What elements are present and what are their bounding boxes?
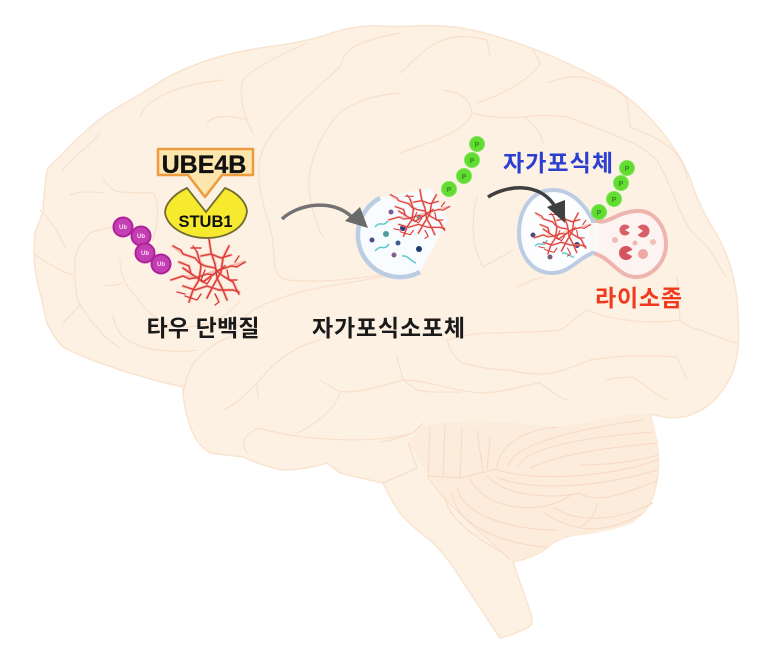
vesicle contents [530,232,580,260]
label: tau protein: 타우 단백질 [146,315,260,341]
phosphate chain: P [625,166,630,173]
arrow: autophagosome to autolysosome [488,188,565,223]
ubiquitin chain: Ub [119,225,127,231]
STUB1 yellow enzyme: STUB1 [178,213,233,231]
phosphate chain [592,160,634,220]
tau fibrils [171,239,245,305]
sulci [35,33,737,453]
phosphate chain: P [470,158,475,165]
vesicle [358,188,448,277]
tau fibrils [389,190,450,238]
panel: autophagosome [312,136,484,341]
panel: tau protein with ubiquitin and STUB1 [114,149,260,341]
lysosome part [593,211,666,277]
autophagosome part [519,190,593,273]
ubiquitin chain: Ub [141,251,149,257]
phosphate chain: P [462,174,467,181]
phosphate chain: P [475,142,480,149]
ubiquitin chain: Ub [137,234,145,240]
phosphate chain: P [447,187,452,194]
label: autophagosome: 자가포식소포체 [312,315,465,341]
label: lysosome: 라이소좀 [595,285,682,311]
lysosome enzymes [612,224,656,260]
UBE4B label with pointer [158,149,253,197]
ubiquitin chain [114,218,170,274]
ubiquitin chain: Ub [157,262,165,268]
phosphate chain [442,136,484,196]
phosphate chain: P [612,197,617,204]
STUB1 yellow enzyme [165,188,247,238]
vesicle contents [370,210,422,263]
phosphate chain: P [597,210,602,217]
label: autolysosome: 자가포식체 [503,150,613,176]
tau fibrils [534,208,590,256]
cerebellum [380,414,658,562]
arrow: tau to autophagosome [282,205,368,228]
UBE4B label with pointer: UBE4B [162,151,246,179]
phosphate chain: P [619,181,624,188]
panel: autolysosome [488,150,682,311]
